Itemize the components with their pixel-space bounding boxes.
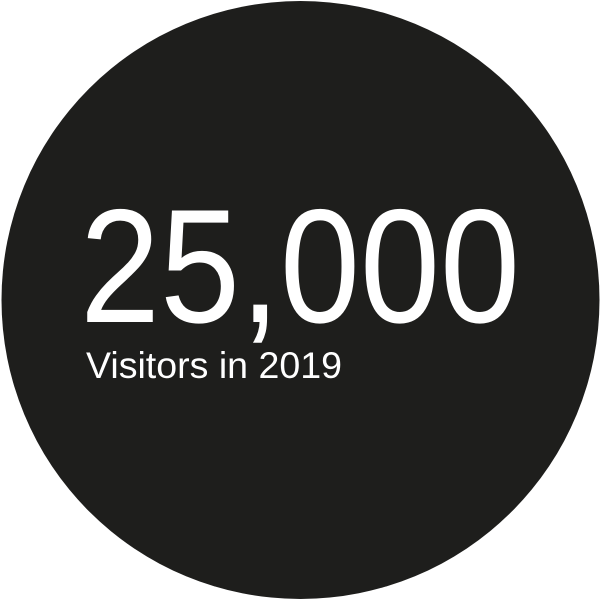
big number: 25,000	[80, 176, 520, 357]
caption: Visitors in 2019	[86, 345, 342, 386]
